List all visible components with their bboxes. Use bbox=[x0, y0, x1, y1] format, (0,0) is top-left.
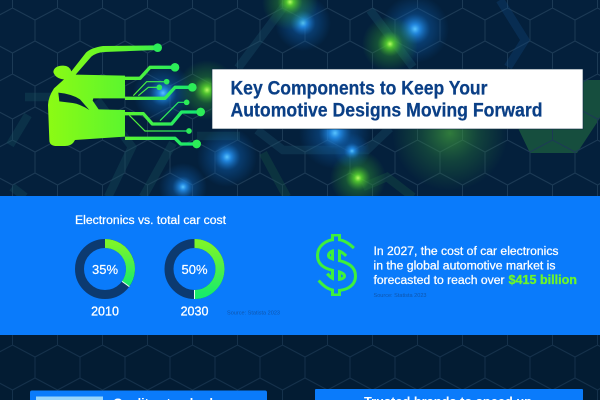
panel: trusted brands bbox=[315, 389, 583, 400]
title box: Key Components to Keep Your bbox=[230, 78, 488, 100]
donut heading: Electronics vs. total car cost bbox=[75, 215, 227, 227]
panel: quality standards bbox=[30, 390, 267, 400]
icon: dollar sign bbox=[322, 234, 351, 296]
forecast text: $415 billion bbox=[508, 273, 577, 287]
lower background bbox=[0, 335, 600, 400]
donut 2030 50%: 2030 bbox=[181, 304, 208, 318]
title box bbox=[212, 69, 583, 129]
donut 2010 35%: 35% bbox=[92, 262, 118, 277]
hero background bbox=[0, 0, 600, 211]
title box: Automotive Designs Moving Forward bbox=[230, 100, 542, 122]
forecast text: forecasted to reach over bbox=[374, 275, 505, 287]
source note left: Source: Statista 2023 bbox=[227, 310, 280, 316]
donut 2030 50% bbox=[169, 244, 220, 318]
forecast text bbox=[374, 246, 577, 299]
donut 2010 35%: 2010 bbox=[91, 304, 119, 318]
icon: circuit car bbox=[48, 43, 205, 148]
forecast text: In 2027, the cost of car electronics bbox=[374, 246, 559, 258]
donut 2010 35% bbox=[80, 244, 130, 318]
forecast text: Source: Statista 2023 bbox=[374, 293, 427, 299]
donut 2030 50%: 50% bbox=[181, 262, 208, 277]
forecast text: in the global automotive market is bbox=[374, 260, 556, 272]
blue stats band bbox=[0, 196, 600, 335]
